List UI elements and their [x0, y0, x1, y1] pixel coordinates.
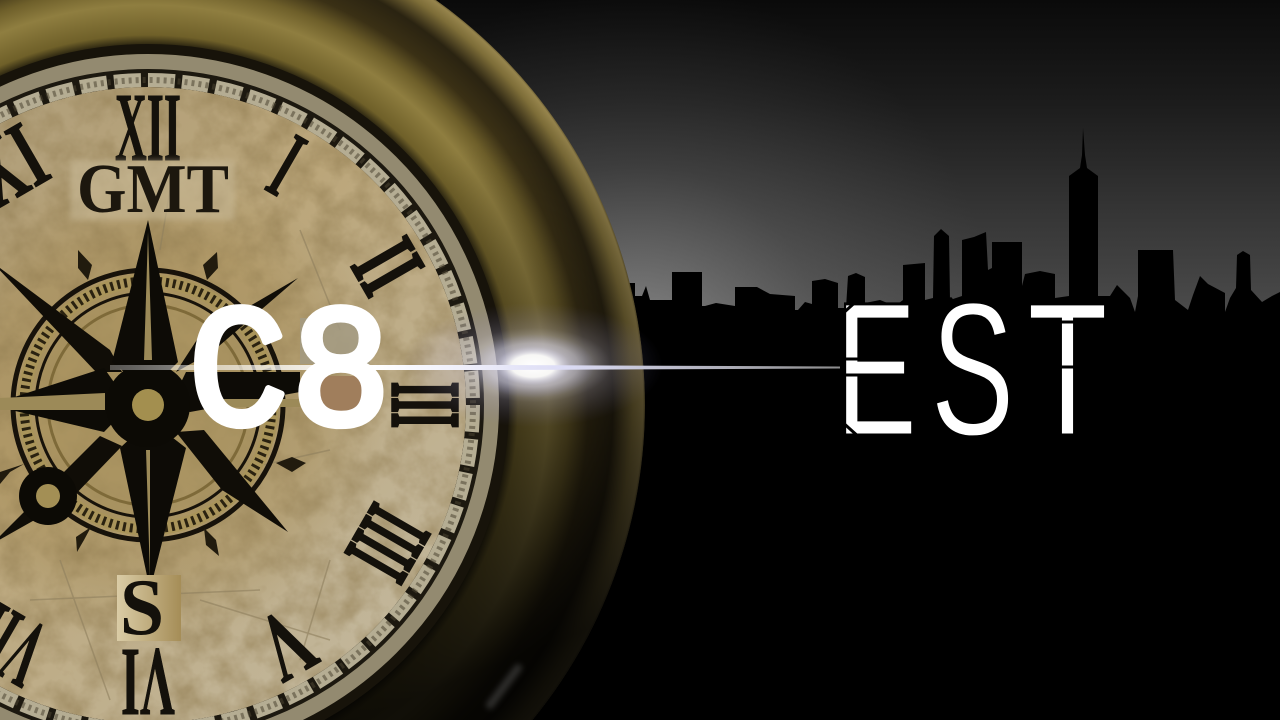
compass hub	[111, 370, 190, 442]
GMT label: GMT	[77, 151, 229, 228]
roman numerals: XII	[115, 74, 181, 181]
dial face with map texture	[0, 87, 466, 720]
digital text EST: EST	[834, 271, 1111, 496]
gold blade highlights	[0, 232, 300, 578]
dial ring	[0, 49, 504, 720]
S label	[117, 575, 181, 641]
roman numerals	[0, 74, 479, 720]
numeral II: II	[332, 222, 445, 310]
numeral V: V	[240, 587, 333, 703]
compass ring	[13, 270, 283, 540]
numeral IIII: IIII	[326, 490, 450, 597]
cardinal blades	[0, 220, 300, 590]
diagonal blades	[0, 262, 298, 544]
compass leaf points	[0, 250, 306, 556]
secondary hub centre	[36, 484, 60, 508]
secondary hub	[19, 467, 77, 525]
digital text EST	[844, 297, 1104, 436]
roman numerals: III	[372, 382, 479, 428]
background: night sky	[440, 0, 1280, 312]
numeral I: I	[252, 114, 321, 216]
light flare	[110, 303, 840, 427]
watch bezel	[0, 0, 660, 720]
segment gaps	[840, 298, 1080, 438]
compass rose	[0, 220, 306, 590]
S label: S	[120, 564, 164, 652]
city skyline silhouette	[600, 128, 1280, 346]
hub centre	[132, 389, 164, 421]
bezel glint	[490, 668, 518, 705]
digital text C8: C8	[188, 280, 391, 477]
pocket watch	[0, 0, 660, 720]
